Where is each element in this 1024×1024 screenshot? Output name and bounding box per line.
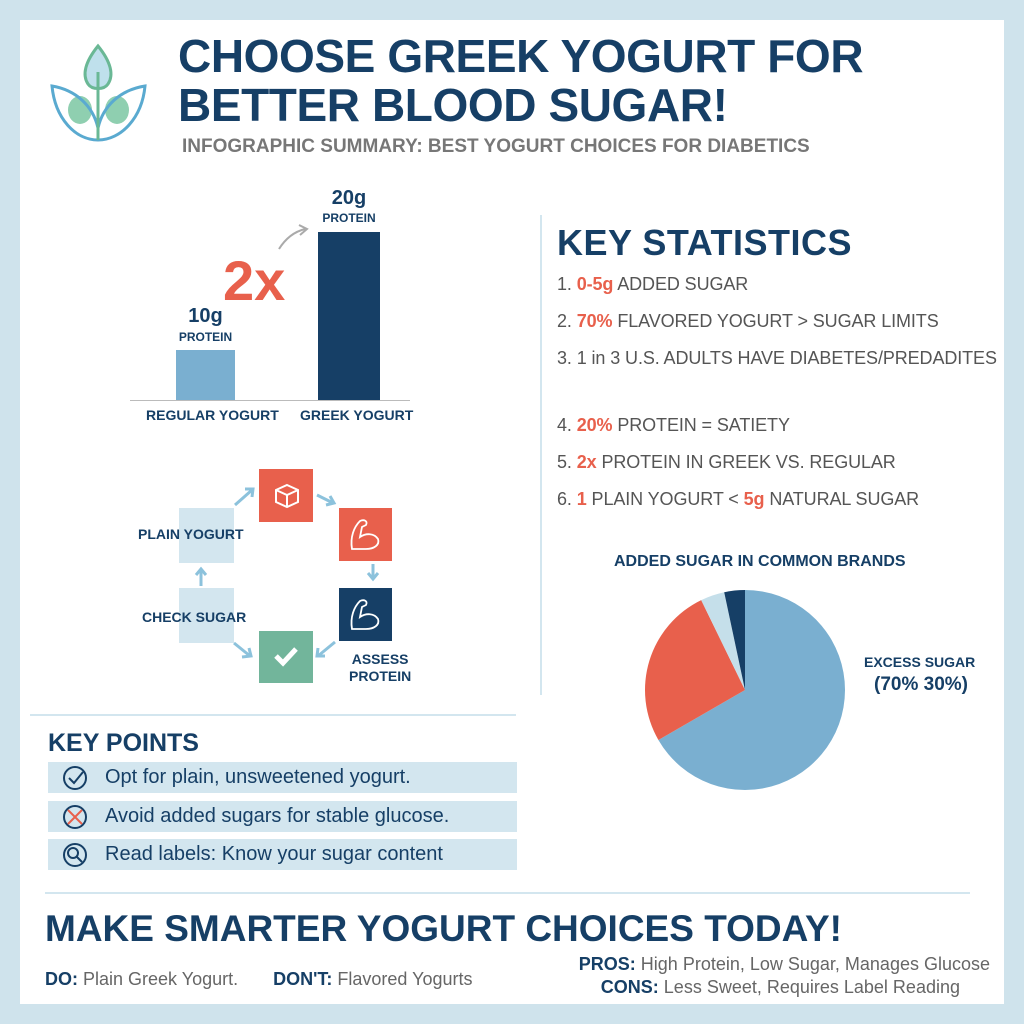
bar chart: protein comparison <box>130 187 414 423</box>
footer pros/cons: PROS: High Protein, Low Sugar, Manages Glucose <box>579 954 990 974</box>
pie chart: added sugar: EXCESS SUGAR <box>864 654 975 670</box>
flow diagram: PLAIN YOGURT <box>138 526 244 542</box>
flow diagram: CHECK SUGAR <box>142 609 246 625</box>
stats list: 2. 70% FLAVORED YOGURT > SUGAR LIMITS <box>557 311 939 331</box>
title: BETTER BLOOD SUGAR! <box>178 79 728 131</box>
key point 2 <box>48 801 517 832</box>
heading: key statistics: KEY STATISTICS <box>557 222 852 263</box>
key point 1: Opt for plain, unsweetened yogurt. <box>105 766 411 788</box>
flow diagram <box>138 469 411 684</box>
title: CHOOSE GREEK YOGURT FOR <box>178 30 863 82</box>
footer heading: MAKE SMARTER YOGURT CHOICES TODAY! <box>45 908 842 949</box>
icon: logo plant <box>50 44 147 142</box>
flow diagram: ASSESS <box>352 651 409 667</box>
callout: 2x: 2x <box>223 249 285 312</box>
bar chart: protein comparison: REGULAR YOGURT <box>146 407 279 423</box>
key point 2: Avoid added sugars for stable glucose. <box>105 805 449 827</box>
stats list <box>557 274 997 509</box>
bar chart: protein comparison: PROTEIN <box>179 330 232 344</box>
bar chart: protein comparison: 20g <box>332 187 366 209</box>
pie chart: added sugar: (70% 30%) <box>874 674 968 695</box>
footer pros/cons <box>579 954 990 997</box>
key point 1 <box>48 762 517 793</box>
bar: regular yogurt <box>176 350 235 400</box>
key point 3 <box>48 839 517 870</box>
stats list: 3. 1 in 3 U.S. ADULTS HAVE DIABETES/PREDADITES <box>557 348 997 368</box>
pie chart: added sugar <box>614 553 975 790</box>
bar chart: protein comparison: GREEK YOGURT <box>300 407 413 423</box>
pie chart: added sugar: ADDED SUGAR IN COMMON BRANDS <box>614 553 906 570</box>
footer pros/cons: CONS: Less Sweet, Requires Label Reading <box>601 977 960 997</box>
bar chart: protein comparison: PROTEIN <box>322 211 376 225</box>
heading: key points: KEY POINTS <box>48 729 199 757</box>
subtitle: INFOGRAPHIC SUMMARY: BEST YOGURT CHOICES FOR DIABETICS <box>182 136 810 157</box>
key point 3: Read labels: Know your sugar content <box>105 843 443 865</box>
stats list: 6. 1 PLAIN YOGURT < 5g NATURAL SUGAR <box>557 489 919 509</box>
flow diagram: PROTEIN <box>349 668 411 684</box>
footer do/don't: DO: Plain Greek Yogurt. DON'T: Flavored Yogurts <box>45 969 472 989</box>
bar chart: protein comparison: 10g <box>188 305 223 327</box>
stats list: 4. 20% PROTEIN = SATIETY <box>557 415 790 435</box>
bar: greek yogurt <box>318 232 380 400</box>
title <box>178 30 863 131</box>
stats list: 1. 0-5g ADDED SUGAR <box>557 274 748 294</box>
divider vertical <box>540 215 542 695</box>
stats list: 5. 2x PROTEIN IN GREEK VS. REGULAR <box>557 452 896 472</box>
